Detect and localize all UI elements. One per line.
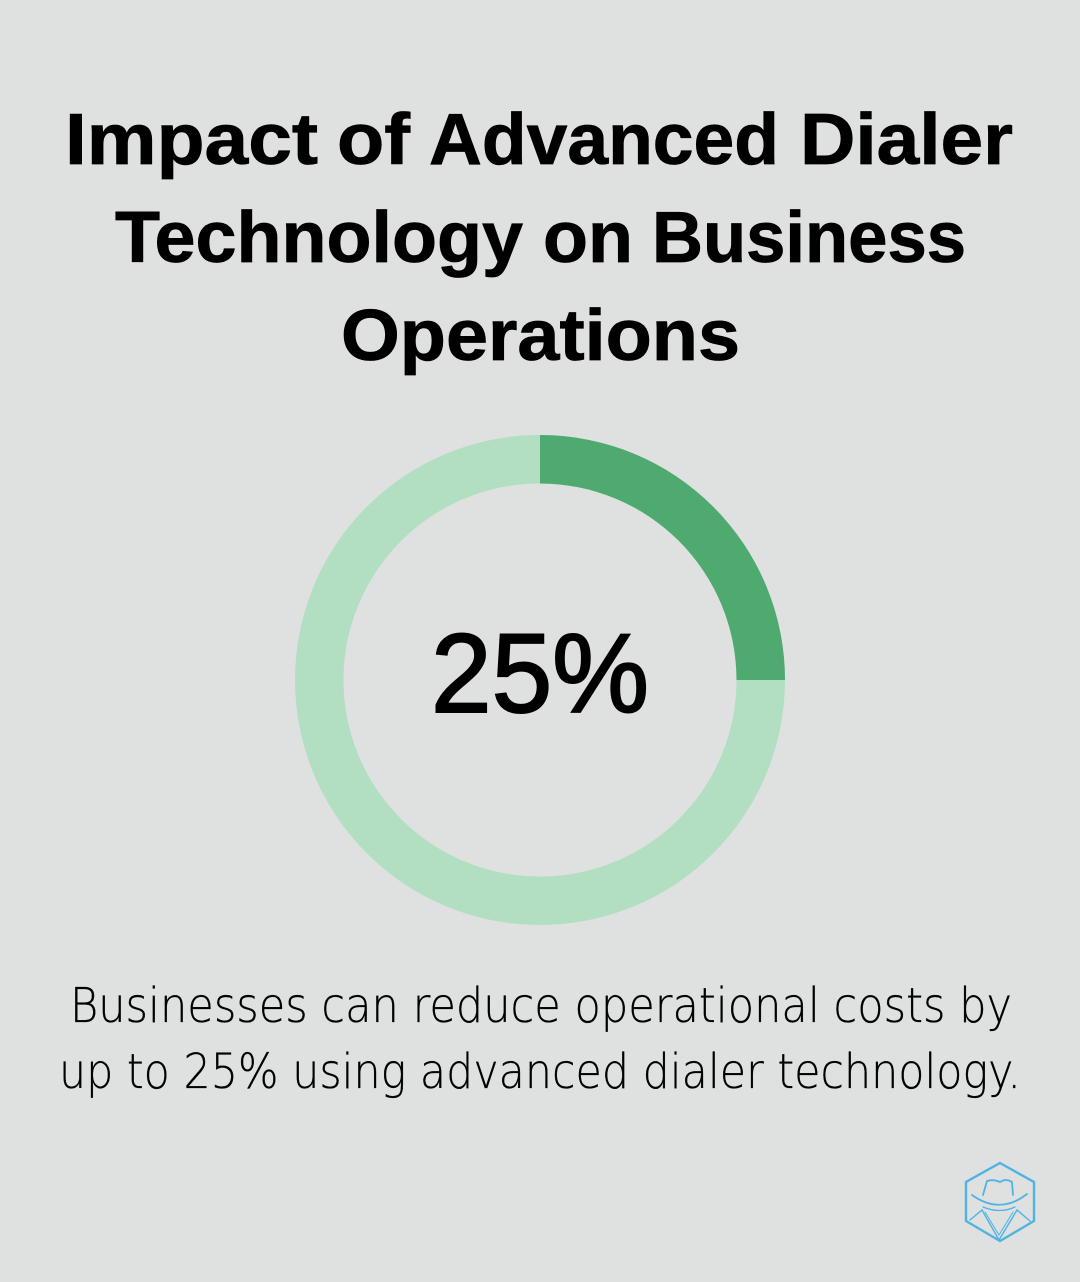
title: Technology	[115, 198, 523, 278]
donut highlighted 25% segment	[540, 435, 785, 680]
title: Advanced	[429, 100, 779, 180]
title: Impact	[65, 100, 318, 180]
title: on	[543, 198, 633, 278]
donut center value: 25%	[431, 611, 649, 736]
title: of	[337, 100, 411, 180]
description text	[59, 978, 1021, 1100]
title	[65, 100, 1013, 376]
title: Operations	[341, 296, 740, 376]
icon: hexagon spy logo	[966, 1163, 1034, 1241]
donut chart: 25%	[319, 435, 785, 901]
title: Business	[652, 198, 966, 278]
title: Dialer	[800, 100, 1013, 180]
donut remainder ring	[319, 459, 761, 901]
